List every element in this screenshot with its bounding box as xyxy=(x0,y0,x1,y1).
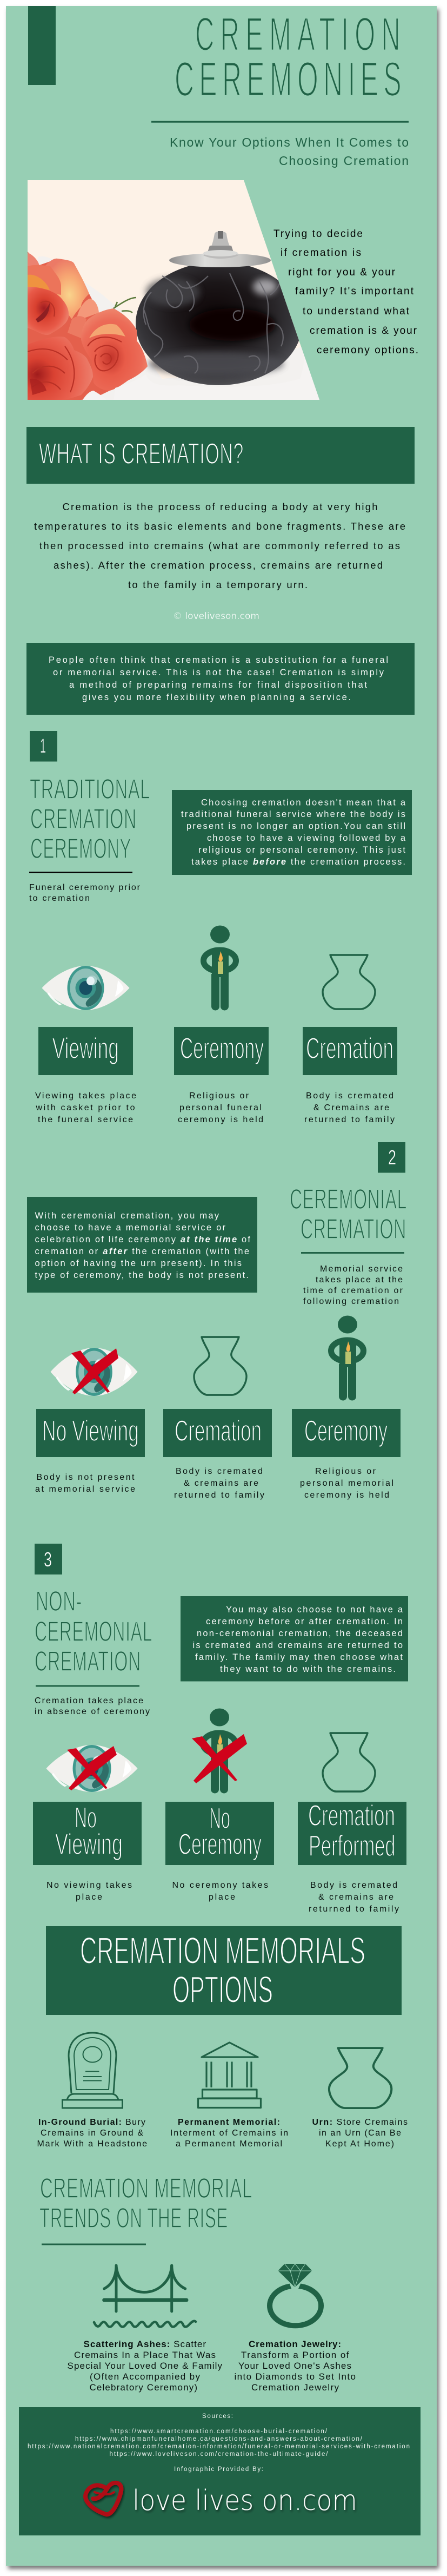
callout: traditional: present is no longer an option.You can still xyxy=(186,821,405,831)
number badge 2 xyxy=(378,1142,405,1173)
number badge 2: 2 xyxy=(388,1147,396,1169)
callout: traditional: Choosing cremation doesn't mean that a xyxy=(201,798,406,807)
description: ceremony: Religious or xyxy=(315,1467,376,1476)
sources list: https://www.loveliveson.com/cremation-the-ultimate-guide/ xyxy=(109,2451,328,2458)
callout: ceremonial: With ceremonial cremation, you may xyxy=(35,1211,219,1221)
intro text xyxy=(273,228,418,356)
heading: traditional cremation ceremony: CEREMONY xyxy=(30,833,131,865)
trend: scattering ashes: (Often Accompanied by xyxy=(90,2371,200,2382)
icon: person with candle xyxy=(331,1316,363,1400)
callout: ceremonial: option of having the urn present). In this xyxy=(35,1259,242,1268)
heading: memorial trends: TRENDS ON THE RISE xyxy=(39,2203,228,2234)
banner: what is cremation: WHAT IS CREMATION? xyxy=(39,437,244,470)
callout: ceremonial: celebration of life ceremony at the time of xyxy=(35,1235,250,1244)
title rule xyxy=(151,121,409,123)
trend: scattering ashes: Special Your Loved One & Family xyxy=(67,2361,223,2371)
callout: traditional xyxy=(172,790,412,875)
section 3 subtitle xyxy=(35,1696,150,1716)
section 2 subtitle: time of cremation or xyxy=(303,1286,403,1295)
callout: non-ceremonial: is cremated and cremains are returned to xyxy=(192,1641,403,1650)
description: no viewing: at memorial service xyxy=(35,1485,135,1494)
icon: eye xyxy=(42,966,130,1010)
description: cremation performed: returned to family xyxy=(309,1905,399,1914)
section 2 subtitle: Memorial service xyxy=(320,1264,403,1274)
section 2 subtitle xyxy=(303,1264,403,1306)
heading: memorial trends xyxy=(39,2173,252,2234)
callout: non-ceremonial: You may also choose to not have a xyxy=(226,1605,403,1615)
sources list: Infographic Provided By: xyxy=(174,2466,263,2473)
number badge 1 xyxy=(30,731,57,762)
description: ceremony: personal memorial xyxy=(300,1479,393,1488)
description: no ceremony xyxy=(172,1881,268,1902)
description: no ceremony: No ceremony takes xyxy=(172,1881,268,1890)
icon: bridge over water xyxy=(94,2265,196,2327)
description: no viewing: No viewing takes xyxy=(46,1881,132,1890)
icon: crossed-out eye xyxy=(46,1745,137,1792)
sources list: https://www.smartcremation.com/choose-burial-cremation/ xyxy=(110,2428,328,2435)
number badge 1: 1 xyxy=(40,735,46,757)
front cloth xyxy=(83,358,319,400)
memorial: urn: Urn: Store Cremains xyxy=(312,2118,408,2127)
intro text: ceremony options. xyxy=(317,345,418,356)
number badge 3 xyxy=(35,1544,62,1574)
footer panel: sources and logo xyxy=(19,2407,421,2535)
step: cremation performed xyxy=(298,1798,406,1865)
section 1 subtitle xyxy=(29,883,141,903)
heading: non-ceremonial cremation: CEREMONIAL xyxy=(35,1616,152,1648)
roses xyxy=(28,253,39,266)
step: ceremony: Ceremony xyxy=(180,1031,264,1065)
icon: diamond ring xyxy=(270,2264,321,2325)
step: cremation xyxy=(163,1409,272,1457)
section 2 subtitle: following cremation xyxy=(303,1297,399,1306)
callout: non-ceremonial: non-ceremonial cremation, the deceased xyxy=(197,1629,403,1638)
intro text: cremation is & your xyxy=(310,325,417,337)
icon: permanent memorial xyxy=(198,2043,261,2108)
memorial: permanent memorial: a Permanent Memorial xyxy=(176,2139,282,2149)
icon: headstone xyxy=(63,2033,122,2108)
description: viewing: Viewing takes place xyxy=(35,1091,136,1101)
icon: crossed-out eye xyxy=(50,1348,138,1396)
step: no viewing: Viewing xyxy=(55,1827,123,1861)
subtitle xyxy=(170,135,409,168)
memorial: in-ground burial: Cremains in Ground & xyxy=(41,2129,143,2138)
heading: non-ceremonial cremation: CREMATION xyxy=(35,1646,141,1677)
section 3 subtitle: Cremation takes place xyxy=(35,1696,143,1705)
sources list xyxy=(28,2413,410,2473)
description: no viewing: place xyxy=(76,1893,102,1902)
logo heart xyxy=(85,2483,121,2514)
roses base xyxy=(28,252,148,400)
heading: memorial trends: CREMATION MEMORIAL xyxy=(40,2173,252,2204)
description: viewing: with casket prior to xyxy=(36,1103,135,1112)
trend: cremation jewelry: Transform a Portion of xyxy=(241,2350,349,2360)
icon: urn xyxy=(329,2048,391,2108)
banner: what is cremation xyxy=(26,427,415,484)
trend: cremation jewelry: Cremation Jewelry xyxy=(251,2382,339,2393)
callout: traditional: religious or personal ceremony. This just xyxy=(198,845,405,855)
step: no viewing: No xyxy=(75,1801,97,1834)
step: no viewing xyxy=(33,1801,142,1865)
banner: cremation memorials options xyxy=(46,1926,402,2015)
description: ceremony: Religious or xyxy=(189,1091,249,1101)
rule xyxy=(301,1252,404,1254)
banner: cremation memorials options: OPTIONS xyxy=(172,1968,273,2011)
memorial: urn: Kept At Home) xyxy=(325,2139,394,2149)
trend: scattering ashes: Scattering Ashes: Scatter xyxy=(83,2339,206,2349)
urn body xyxy=(136,262,302,385)
rule xyxy=(36,1685,139,1687)
callout: traditional: choose to have a viewing followed by a xyxy=(207,833,406,843)
trend: scattering ashes: Celebratory Ceremony) xyxy=(90,2382,197,2393)
step: viewing: Viewing xyxy=(52,1031,119,1065)
sources list: https://www.nationalcremation.com/cremation-information/funeral-or-memorial-services-with-cremation xyxy=(28,2443,410,2450)
step: cremation performed: Performed xyxy=(309,1829,396,1862)
copyright: © loveliveson.com xyxy=(173,611,259,622)
intro text: if cremation is xyxy=(281,247,361,259)
callout: non-ceremonial xyxy=(181,1596,408,1682)
description: cremation: Body is cremated xyxy=(176,1467,263,1476)
urn engraving xyxy=(143,271,283,373)
callout: traditional: takes place before the cremation process. xyxy=(191,857,405,867)
trend: scattering ashes: Cremains In a Place That Was xyxy=(74,2350,216,2360)
callout: non-ceremonial: family. The family may then choose what xyxy=(195,1652,403,1662)
logo wordmark: love lives on.com xyxy=(132,2485,357,2517)
step: no viewing xyxy=(36,1409,145,1457)
memorial: urn xyxy=(312,2118,408,2149)
heading: ceremonial cremation xyxy=(290,1184,407,1245)
memorial: in-ground burial: In-Ground Burial: Bury xyxy=(38,2118,145,2127)
description: cremation performed xyxy=(309,1881,399,1914)
heading: traditional cremation ceremony: TRADITIONAL xyxy=(30,774,150,805)
description: ceremony xyxy=(300,1467,393,1500)
title xyxy=(175,8,406,107)
callout: substitution myth xyxy=(26,643,415,715)
memorial: permanent memorial: Permanent Memorial: xyxy=(178,2118,280,2127)
intro text: family? It's important xyxy=(295,286,414,297)
description: no viewing: Body is not present xyxy=(37,1473,135,1482)
description: ceremony: personal funeral xyxy=(179,1103,262,1112)
description: cremation performed: & cremains are xyxy=(318,1893,393,1902)
trend: cremation jewelry: into Diamonds to Set Into xyxy=(235,2371,356,2382)
icon: crossed-out person xyxy=(192,1709,247,1793)
callout: substitution myth: People often think that cremation is a substitution for a funeral xyxy=(49,655,388,665)
intro text: to understand what xyxy=(303,306,410,317)
step: viewing xyxy=(38,1027,133,1075)
description: cremation: & Cremains are xyxy=(313,1103,389,1112)
subtitle: Choosing Cremation xyxy=(279,154,409,168)
step: no viewing: No Viewing xyxy=(42,1414,139,1447)
step: ceremony xyxy=(174,1027,269,1075)
sources list: https://www.chipmanfuneralhome.ca/questions-and-answers-about-cremation/ xyxy=(75,2436,363,2442)
intro text: right for you & your xyxy=(288,267,396,278)
description: ceremony xyxy=(178,1091,263,1124)
section 1 subtitle: to cremation xyxy=(29,894,90,903)
description: cremation xyxy=(174,1467,264,1500)
callout: ceremonial: type of ceremony, the body is not present. xyxy=(35,1270,249,1280)
step: ceremony xyxy=(292,1409,401,1457)
step: cremation xyxy=(303,1027,397,1075)
icon: urn xyxy=(323,955,375,1009)
heading: traditional cremation ceremony xyxy=(30,774,150,865)
description: viewing: the funeral service xyxy=(38,1115,133,1124)
heading: non-ceremonial cremation xyxy=(35,1586,152,1677)
definition paragraph xyxy=(34,501,405,590)
sources list: Sources: xyxy=(202,2413,233,2420)
section 1 subtitle: Funeral ceremony prior xyxy=(29,883,141,892)
definition paragraph: temperatures to its basic elements and bone fragments. These are xyxy=(34,521,405,532)
trend: scattering ashes xyxy=(67,2339,223,2393)
hero photo: urn and roses xyxy=(28,180,335,400)
step: cremation: Cremation xyxy=(175,1414,262,1447)
subtitle: Know Your Options When It Comes to xyxy=(170,135,409,149)
trend: cremation jewelry: Cremation Jewelry: xyxy=(249,2339,341,2349)
header accent block xyxy=(28,6,56,85)
step: cremation: Cremation xyxy=(306,1031,393,1065)
step: no ceremony xyxy=(165,1801,274,1865)
definition paragraph: to the family in a temporary urn. xyxy=(128,579,308,590)
description: cremation: Body is cremated xyxy=(306,1091,393,1101)
description: ceremony: ceremony is held xyxy=(178,1115,263,1124)
definition paragraph: ashes). After the cremation process, cremains are returned xyxy=(54,559,383,571)
step: no ceremony: Ceremony xyxy=(178,1827,262,1861)
callout: substitution myth: a method of preparing remains for final disposition that xyxy=(69,680,367,690)
callout: substitution myth: or memorial service. This is not the case! Cremation is simply xyxy=(53,668,384,677)
section 3 subtitle: in absence of ceremony xyxy=(35,1707,150,1716)
callout: ceremonial xyxy=(27,1197,257,1293)
heading: non-ceremonial cremation: NON- xyxy=(36,1586,82,1617)
description: ceremony: ceremony is held xyxy=(304,1491,389,1500)
rule xyxy=(29,872,132,873)
rule xyxy=(42,2243,146,2245)
description: viewing xyxy=(35,1091,136,1124)
step: ceremony: Ceremony xyxy=(304,1414,388,1447)
memorial: permanent memorial xyxy=(170,2118,288,2149)
urn lid xyxy=(169,253,271,267)
callout: non-ceremonial: they want to do with the cremains. xyxy=(220,1664,396,1674)
section 2 subtitle: takes place at the xyxy=(316,1275,403,1284)
callout: substitution myth: gives you more flexibility when planning a service. xyxy=(82,693,351,702)
icon: urn xyxy=(194,1337,246,1395)
memorial: permanent memorial: Interment of Cremains in xyxy=(170,2129,288,2138)
trend: cremation jewelry: Your Loved One's Ashes xyxy=(238,2361,351,2371)
description: cremation: returned to family xyxy=(174,1491,264,1500)
description: no viewing xyxy=(35,1473,135,1494)
description: cremation xyxy=(304,1091,395,1124)
step: cremation performed: Cremation xyxy=(308,1798,395,1832)
memorial: in-ground burial: Mark With a Headstone xyxy=(37,2139,147,2149)
number badge 3: 3 xyxy=(44,1549,52,1571)
callout: ceremonial: choose to have a memorial service or xyxy=(35,1223,226,1233)
callout: non-ceremonial: ceremony before or after cremation. In xyxy=(206,1617,403,1626)
definition paragraph: Cremation is the process of reducing a body at very high xyxy=(63,501,377,512)
description: no ceremony: place xyxy=(209,1893,235,1902)
icon: urn xyxy=(323,1733,375,1791)
description: cremation performed: Body is cremated xyxy=(310,1881,397,1890)
description: cremation: returned to family xyxy=(304,1115,395,1124)
callout: traditional: traditional funeral service where the body is xyxy=(181,809,405,819)
memorial: in-ground burial xyxy=(37,2118,147,2149)
leaves xyxy=(114,298,136,313)
description: no viewing xyxy=(46,1881,132,1902)
memorial: urn: in an Urn (Can Be xyxy=(319,2129,401,2138)
intro text: Trying to decide xyxy=(273,228,363,240)
heading: traditional cremation ceremony: CREMATION xyxy=(30,803,137,835)
icon: person with candle xyxy=(203,925,236,1011)
white cloth xyxy=(28,256,335,400)
callout: ceremonial: cremation or after the cremation (with the xyxy=(35,1247,249,1256)
definition paragraph: then processed into cremains (what are commonly referred to as xyxy=(39,540,400,551)
trend: cremation jewelry xyxy=(235,2339,356,2393)
description: cremation: & cremains are xyxy=(184,1479,258,1488)
step: no ceremony: No xyxy=(209,1801,230,1835)
